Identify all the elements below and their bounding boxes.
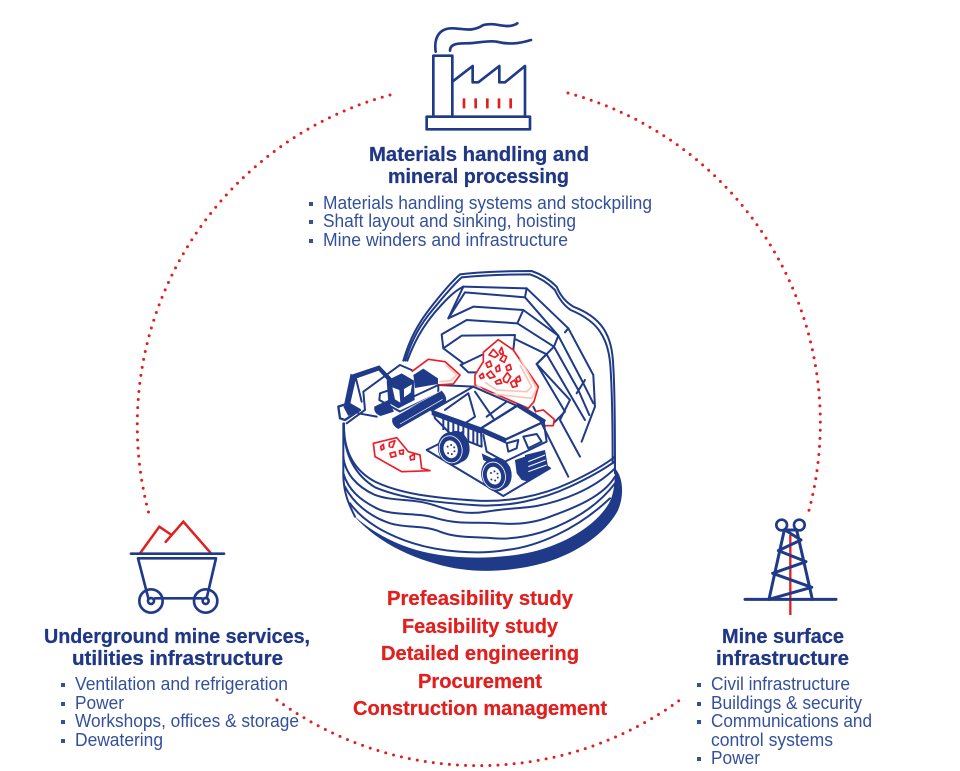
list: surface infrastructure: Civil infrastructure	[711, 674, 850, 694]
heading: surface infrastructure: infrastructure	[716, 648, 849, 670]
pit benches	[442, 287, 527, 350]
pit base crescent	[353, 468, 622, 571]
red project phases: Detailed engineering	[381, 643, 579, 665]
list: surface infrastructure: control systems	[711, 730, 833, 750]
excavator	[338, 365, 446, 429]
list: underground services: Workshops, offices & storage	[75, 711, 299, 731]
list: underground services: Power	[75, 693, 124, 713]
heading: underground services: Underground mine services,	[44, 626, 310, 648]
heading: underground services	[44, 626, 310, 670]
illustration: open pit mine	[338, 271, 622, 571]
dotted cycle ring	[137, 93, 820, 766]
list: underground services	[61, 674, 299, 750]
outer contours	[403, 271, 615, 467]
ground floor lines	[347, 365, 412, 423]
haul truck	[432, 387, 548, 495]
red project phases: Construction management	[353, 698, 607, 720]
heading: surface infrastructure	[716, 626, 849, 670]
heading: materials handling: mineral processing	[388, 166, 569, 188]
list: materials handling: Shaft layout and sinking, hoisting	[323, 211, 576, 231]
list: materials handling: Mine winders and infrastructure	[323, 230, 568, 250]
list: surface infrastructure: Communications and	[711, 711, 872, 731]
red project phases: Procurement	[418, 671, 542, 693]
heading: materials handling	[369, 144, 589, 188]
list: surface infrastructure: Buildings & security	[711, 693, 862, 713]
red ore stockpiles	[373, 340, 554, 472]
red project phases: Feasibility study	[402, 616, 559, 638]
list: materials handling	[309, 193, 652, 250]
list: underground services: Dewatering	[75, 730, 163, 750]
heading: underground services: utilities infrastructure	[72, 648, 283, 670]
red project phases: Prefeasibility study	[387, 588, 574, 610]
red project phases	[353, 588, 607, 720]
icon: factory	[427, 23, 531, 129]
strata lines	[343, 271, 615, 552]
list: underground services: Ventilation and refrigeration	[75, 674, 288, 694]
list: surface infrastructure: Power	[711, 748, 760, 768]
icon: headframe tower	[745, 520, 836, 615]
list: surface infrastructure	[697, 674, 872, 768]
heading: surface infrastructure: Mine surface	[722, 626, 844, 648]
heading: materials handling: Materials handling and	[369, 144, 589, 166]
list: materials handling: Materials handling systems and stockpiling	[323, 193, 652, 213]
icon: mine cart	[131, 522, 224, 613]
truck wheels	[442, 428, 473, 465]
